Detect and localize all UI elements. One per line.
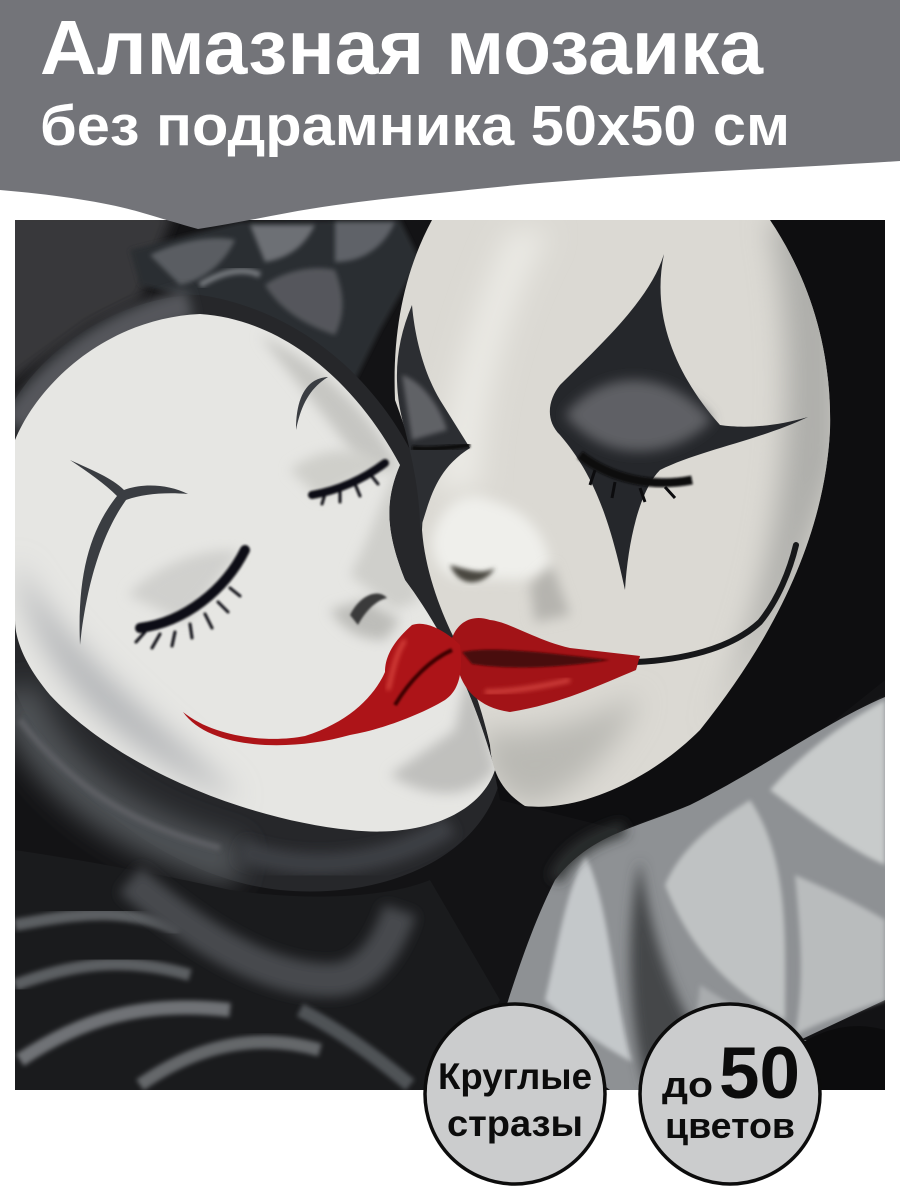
painting background top left [15,220,174,384]
badge: up to 50 colours [640,1004,820,1184]
right clown large diamond eye makeup [550,254,808,590]
left clown face [15,314,495,832]
left clown collar [15,866,424,1090]
right clown ruffled collar [505,697,885,1090]
right clown red lips [452,618,640,712]
top right dark backdrop [770,210,900,330]
right clown black smile line [636,545,796,662]
left clown eyelashes [136,463,385,648]
badge: round rhinestones: Круглые [438,1056,592,1097]
badge: up to 50 colours: 50 [719,1033,800,1114]
subtitle: без подрамника 50х50 см [40,94,790,158]
left clown red lips and smile [183,624,461,745]
badge: up to 50 colours: до [662,1064,713,1105]
left clown brow makeup [70,377,328,645]
title: Алмазная мозаика [40,5,764,91]
right clown left eye makeup [397,305,470,530]
right clown nostril [450,565,495,582]
left clown hood [15,295,500,892]
badge: round rhinestones [425,1004,605,1184]
badge: up to 50 colours: цветов [665,1105,795,1146]
painting: two clowns kissing [0,210,900,1090]
badge: round rhinestones: стразы [447,1103,583,1144]
header banner [0,0,900,229]
left clown nostril [350,593,387,625]
right clown hair and neck shadow [485,220,885,788]
black rose on left clown's head [130,220,420,390]
right clown face [395,220,840,807]
